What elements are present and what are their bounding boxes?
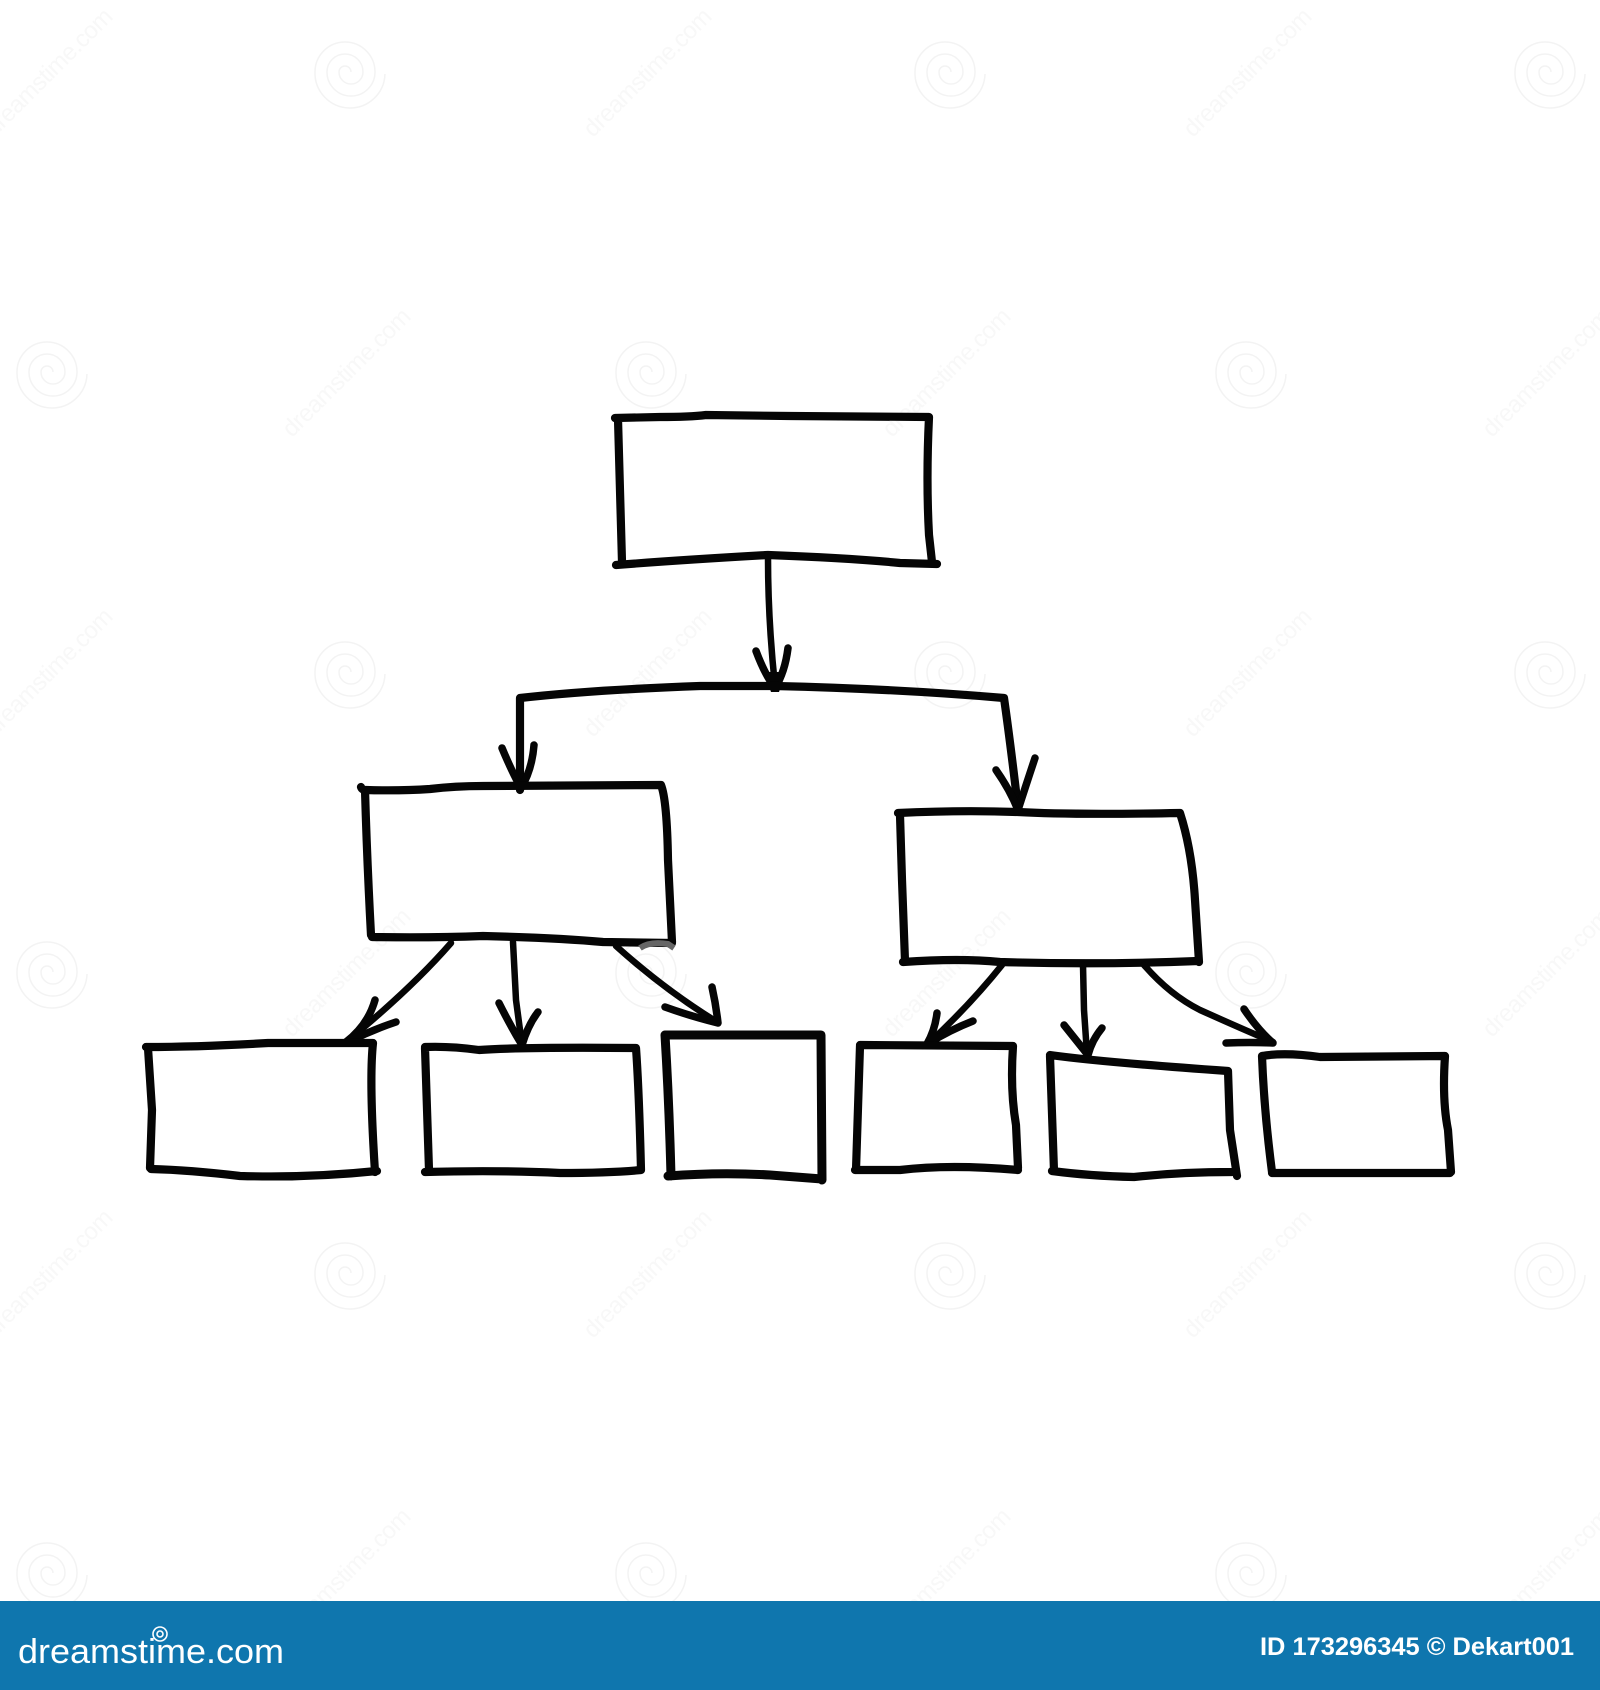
- watermark overlay on corner: [640, 943, 674, 948]
- child box 4: [855, 1045, 1018, 1170]
- footer logo: dreamstime.com: [18, 1633, 284, 1671]
- arrow head: right branch: [996, 758, 1035, 810]
- arrow to child box 1: [346, 943, 451, 1042]
- footer bar: [0, 1601, 1600, 1690]
- flowchart: [146, 415, 1451, 1180]
- arrows: middle right box to children: [927, 965, 1273, 1055]
- watermark pattern: dreamstime.com: [877, 1503, 1016, 1642]
- image id and credit: ID 173296345 © Dekart001: [1260, 1633, 1574, 1661]
- logo spiral: [153, 1627, 167, 1641]
- watermark pattern: dreamstime.com: [1178, 3, 1317, 142]
- arrow to child box 6: [1144, 965, 1273, 1043]
- arrows: middle left box to children: [346, 942, 718, 1045]
- arrow to child box 4: [927, 965, 1002, 1044]
- watermark pattern: dreamstime.com: [578, 1204, 717, 1343]
- watermark pattern: dreamstime.com: [277, 1503, 416, 1642]
- watermark pattern: dreamstime.com: [1178, 1204, 1317, 1343]
- arrow: top box to branch bar: [756, 558, 788, 692]
- top box: [615, 415, 937, 565]
- child box 1: [146, 1043, 377, 1176]
- watermark pattern: dreamstime.com: [877, 303, 1016, 442]
- arrow to child box 3: [616, 946, 718, 1023]
- watermark pattern: dreamstime.com: [1178, 603, 1317, 742]
- middle right box: [898, 811, 1199, 963]
- arrow to child box 5: [1064, 965, 1102, 1055]
- child box 2: [425, 1047, 641, 1173]
- watermark pattern: dreamstime.com: [277, 903, 416, 1042]
- child box 5: [1050, 1055, 1237, 1177]
- child box 3: [665, 1035, 822, 1180]
- branch connector bar: [520, 686, 1018, 808]
- child box 6: [1262, 1054, 1451, 1173]
- watermark pattern: dreamstime.com: [277, 303, 416, 442]
- middle left box: [361, 785, 672, 943]
- arrow head: left branch: [502, 745, 534, 788]
- watermark pattern: dreamstime.com: [877, 903, 1016, 1042]
- arrow to child box 2: [499, 942, 538, 1045]
- watermark pattern: dreamstime.com: [578, 3, 717, 142]
- watermark pattern: dreamstime.com: [578, 603, 717, 742]
